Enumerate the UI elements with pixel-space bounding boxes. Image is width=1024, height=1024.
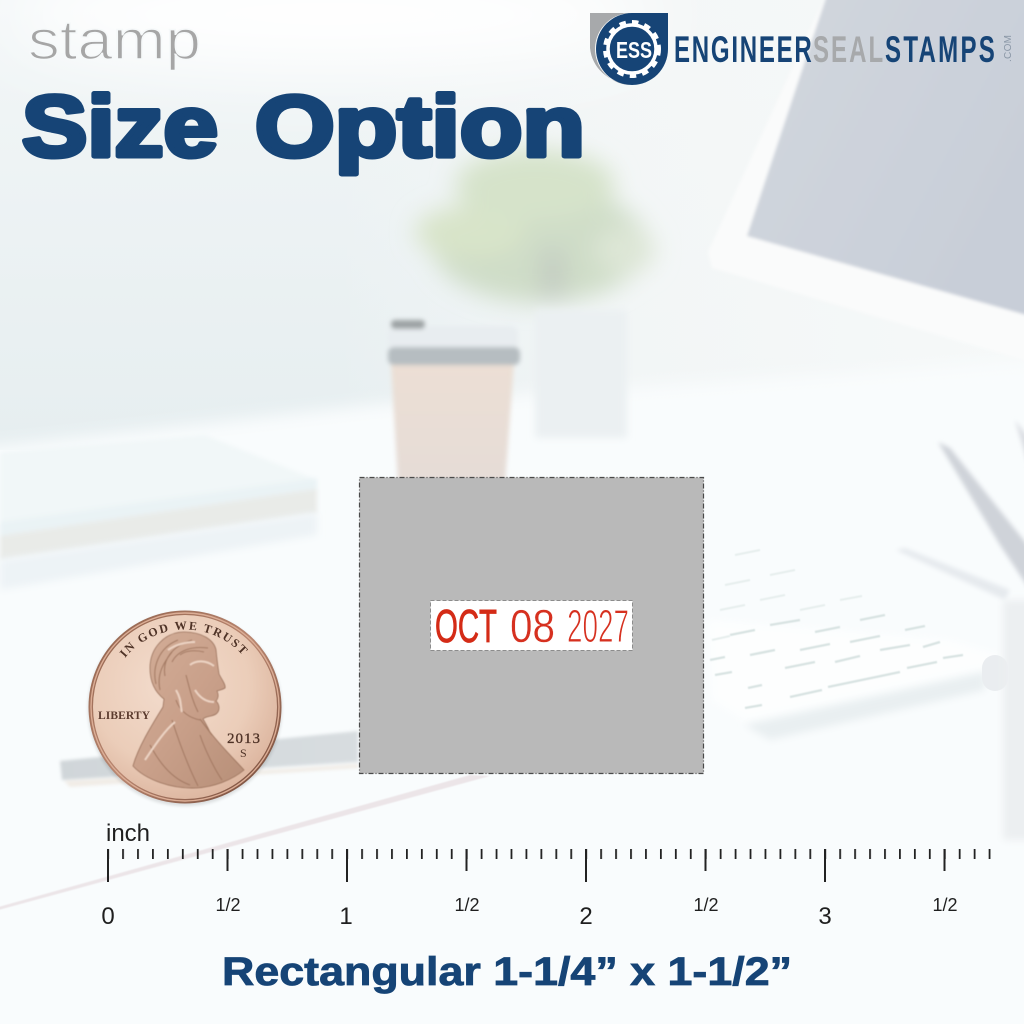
wall brightening on the right [0,0,1024,450]
logo: Engineer Seal Stamps: .COM [1003,35,1014,62]
pencils [896,420,1024,600]
stamp impression label: 08 [510,600,555,652]
stamp impression label: OCT [435,600,497,652]
glass holder [1003,600,1024,840]
logo emblem: ESS [616,37,652,63]
small heading: stamp: stamp [28,8,201,71]
title: Size Option: Size [22,79,218,175]
plant pot [535,310,627,438]
stamp impression label: 2027 [567,600,629,652]
ruler [101,820,992,930]
pen [60,731,358,787]
logo: Engineer Seal Stamps: SEAL [813,29,883,70]
penny coin: 2013 [227,731,260,747]
logo wordmark: ENGINEER [674,29,812,70]
Lincoln portrait [133,632,244,788]
notebook [0,435,317,560]
logo: Engineer Seal Stamps [590,13,1014,85]
paper edge [0,775,490,911]
ruler numbers: 2 [579,903,593,930]
ruler unit label: inch [106,820,150,847]
ruler numbers: 0 [101,903,115,930]
title: Size Option [22,79,585,175]
ruler half marks: 1/2 [693,895,719,915]
stamp size area [360,478,704,774]
logo emblem [590,13,668,85]
monitor [708,0,1024,362]
penny coin: LIBERTY [98,710,151,722]
ruler half marks: 1/2 [454,895,480,915]
plant [415,149,655,303]
wall [0,0,1024,450]
coin inscription: IN GOD WE TRUST [119,622,248,658]
coffee cup [388,320,520,484]
bright window glow [0,0,660,70]
notebook shadow [0,513,317,590]
ruler numbers [101,903,832,930]
ruler half marks: 1/2 [215,895,241,915]
penny coin [87,610,283,807]
caption: stamp dimensions: Rectangular 1-1/4” x 1-1/2” [222,950,792,994]
ruler half marks: 1/2 [932,895,958,915]
ruler numbers: 3 [818,903,832,930]
keyboard [708,550,1008,740]
ruler half marks [215,895,958,915]
stamp impression label [430,600,632,652]
penny coin: S [240,746,247,760]
title: Size Option: Option [255,79,585,175]
logo: Engineer Seal Stamps: STAMPS [885,29,995,70]
bright desk surface [0,360,1024,1024]
ruler numbers: 1 [339,903,353,930]
ruler ticks [107,849,992,882]
